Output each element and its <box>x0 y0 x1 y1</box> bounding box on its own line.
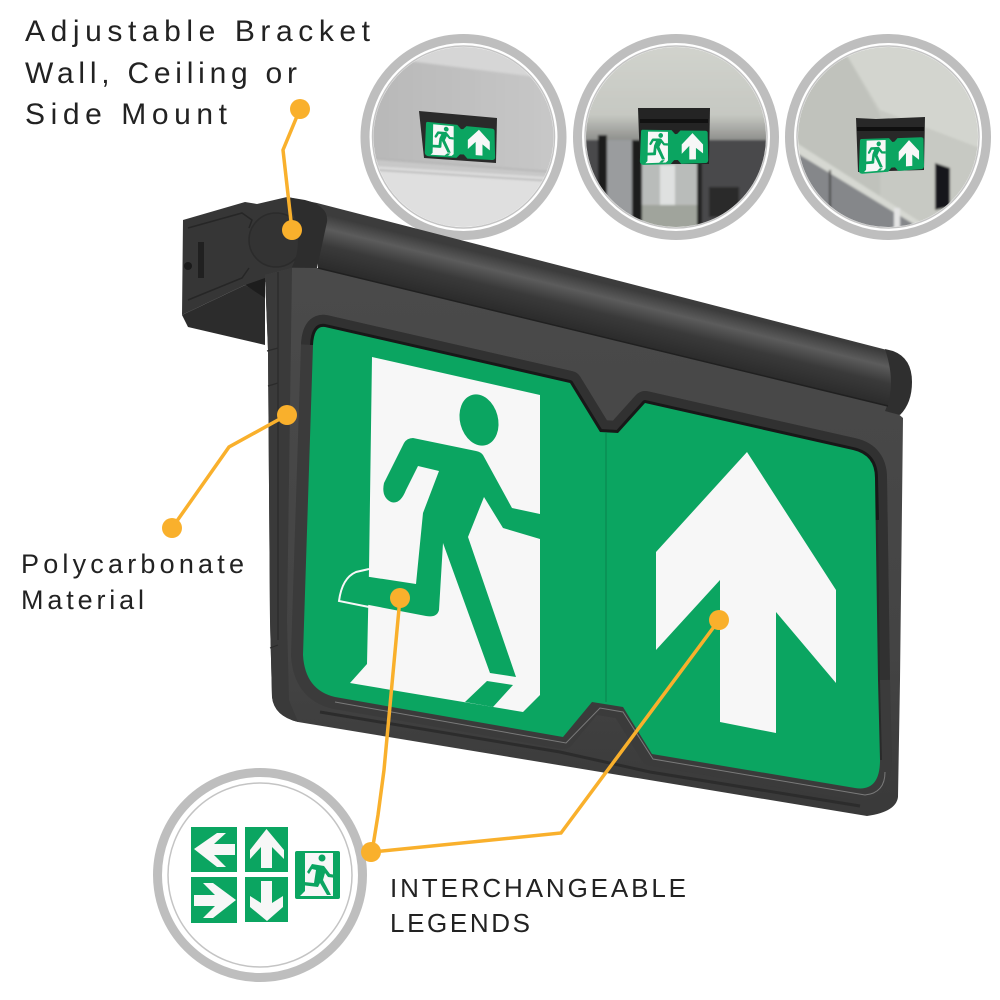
icon: right arrow <box>191 877 237 923</box>
icon: running man <box>295 851 340 899</box>
mounting bracket <box>182 197 327 345</box>
installation photo: ceiling mount <box>578 38 774 236</box>
green legend with running man and arrow <box>303 327 880 788</box>
front plate <box>265 268 903 816</box>
frame top band <box>313 327 878 680</box>
plate side edge <box>265 268 298 722</box>
frame right shadow <box>876 520 880 760</box>
heading: adjustable bracket: Side Mount <box>25 98 228 131</box>
label: polycarbonate material: Polycarbonate <box>21 549 244 579</box>
label: polycarbonate material: Material <box>21 585 144 615</box>
rail left end cap <box>287 197 327 268</box>
callout: bracket leader <box>282 99 310 240</box>
legend frame <box>303 327 880 788</box>
plate side details <box>267 272 278 648</box>
legend seam <box>605 433 607 702</box>
label: interchangeable legends: LEGENDS <box>390 908 530 938</box>
callout: legends leader <box>361 588 729 862</box>
raised heel outline <box>339 569 369 607</box>
interchangeable legends circle <box>158 772 362 978</box>
frame lower shadow <box>320 712 860 806</box>
rail right end cap <box>885 349 912 415</box>
rail shadow line <box>318 268 888 406</box>
frame bottom highlight <box>335 702 885 795</box>
installation photo: wall mount <box>365 38 562 236</box>
exit sign product <box>182 197 912 816</box>
heading: adjustable bracket: Adjustable Bracket <box>25 15 371 48</box>
icon: down arrow <box>245 877 288 922</box>
icon: left arrow <box>191 827 237 872</box>
callout: material leader <box>162 405 297 538</box>
frame inner shadow <box>313 327 876 520</box>
installation photo: side mount <box>790 38 986 236</box>
top rail <box>317 203 895 408</box>
heading: adjustable bracket: Wall, Ceiling or <box>25 57 297 90</box>
label: interchangeable legends: INTERCHANGEABLE <box>390 873 686 903</box>
icon: up arrow <box>245 827 288 872</box>
